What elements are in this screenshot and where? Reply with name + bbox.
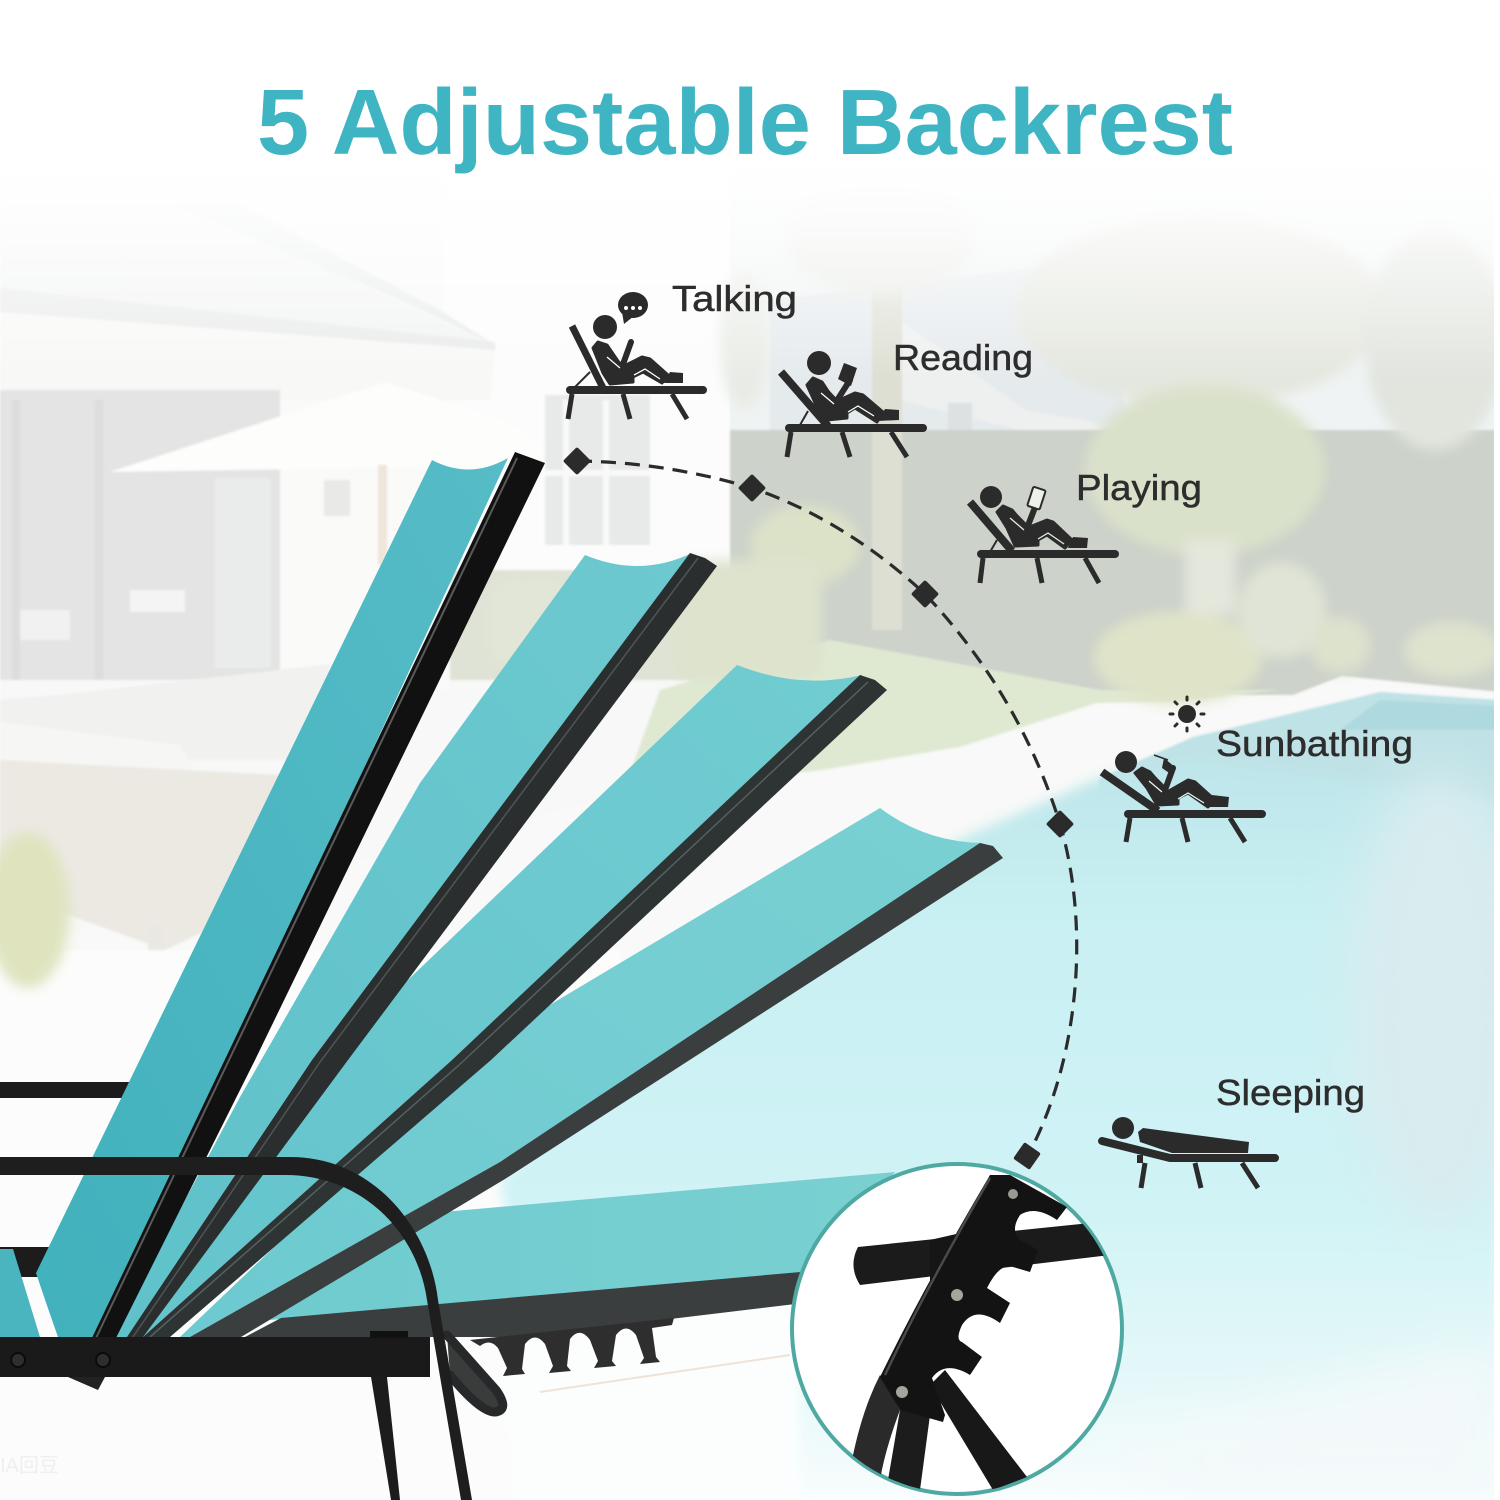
backrest position 5: flat, sleeping	[245, 1172, 895, 1337]
rear bars	[0, 1082, 130, 1277]
rear bracket tab	[930, 1234, 956, 1280]
label: sleeping: Sleeping	[1216, 1072, 1365, 1113]
dashed arc	[577, 461, 1077, 1157]
icon: sunbathing	[1102, 697, 1262, 842]
sun	[1170, 697, 1204, 731]
icon: talking	[568, 292, 703, 419]
cross tube	[853, 1222, 1110, 1285]
seat rail	[0, 1331, 430, 1390]
drink	[1154, 755, 1176, 775]
curved lower tube	[447, 1335, 503, 1412]
rear leg	[371, 1377, 400, 1500]
icon: playing	[970, 486, 1115, 583]
curved frame tube	[852, 1375, 900, 1480]
watermark: IA回豆	[0, 1455, 59, 1477]
backrest position 3: playing	[118, 665, 887, 1337]
armrest	[0, 1157, 472, 1500]
label: reading: Reading	[893, 337, 1033, 378]
backrest position 4: sunbathing	[180, 808, 1003, 1337]
seat fabric piece	[0, 1249, 40, 1337]
title: 5 Adjustable Backrest	[257, 70, 1233, 174]
speech bubble	[618, 292, 648, 324]
icon: reading	[781, 351, 923, 457]
label: playing: Playing	[1076, 467, 1202, 508]
circular detail inset: ratchet bracket	[792, 1164, 1122, 1494]
support legs	[888, 1410, 930, 1490]
label: talking: Talking	[672, 278, 797, 319]
label: sunbathing: Sunbathing	[1216, 723, 1413, 764]
ratchet bracket	[880, 1175, 1067, 1422]
backrest position 2: reading	[112, 553, 717, 1337]
book	[838, 363, 857, 386]
phone	[1027, 487, 1046, 510]
backrest position 1: talking	[36, 452, 545, 1340]
lounge chair with five backrest positions	[0, 452, 1003, 1500]
arc position markers	[566, 450, 1071, 1167]
adjustment hooks	[470, 1318, 674, 1376]
icon: sleeping	[1102, 1117, 1275, 1188]
